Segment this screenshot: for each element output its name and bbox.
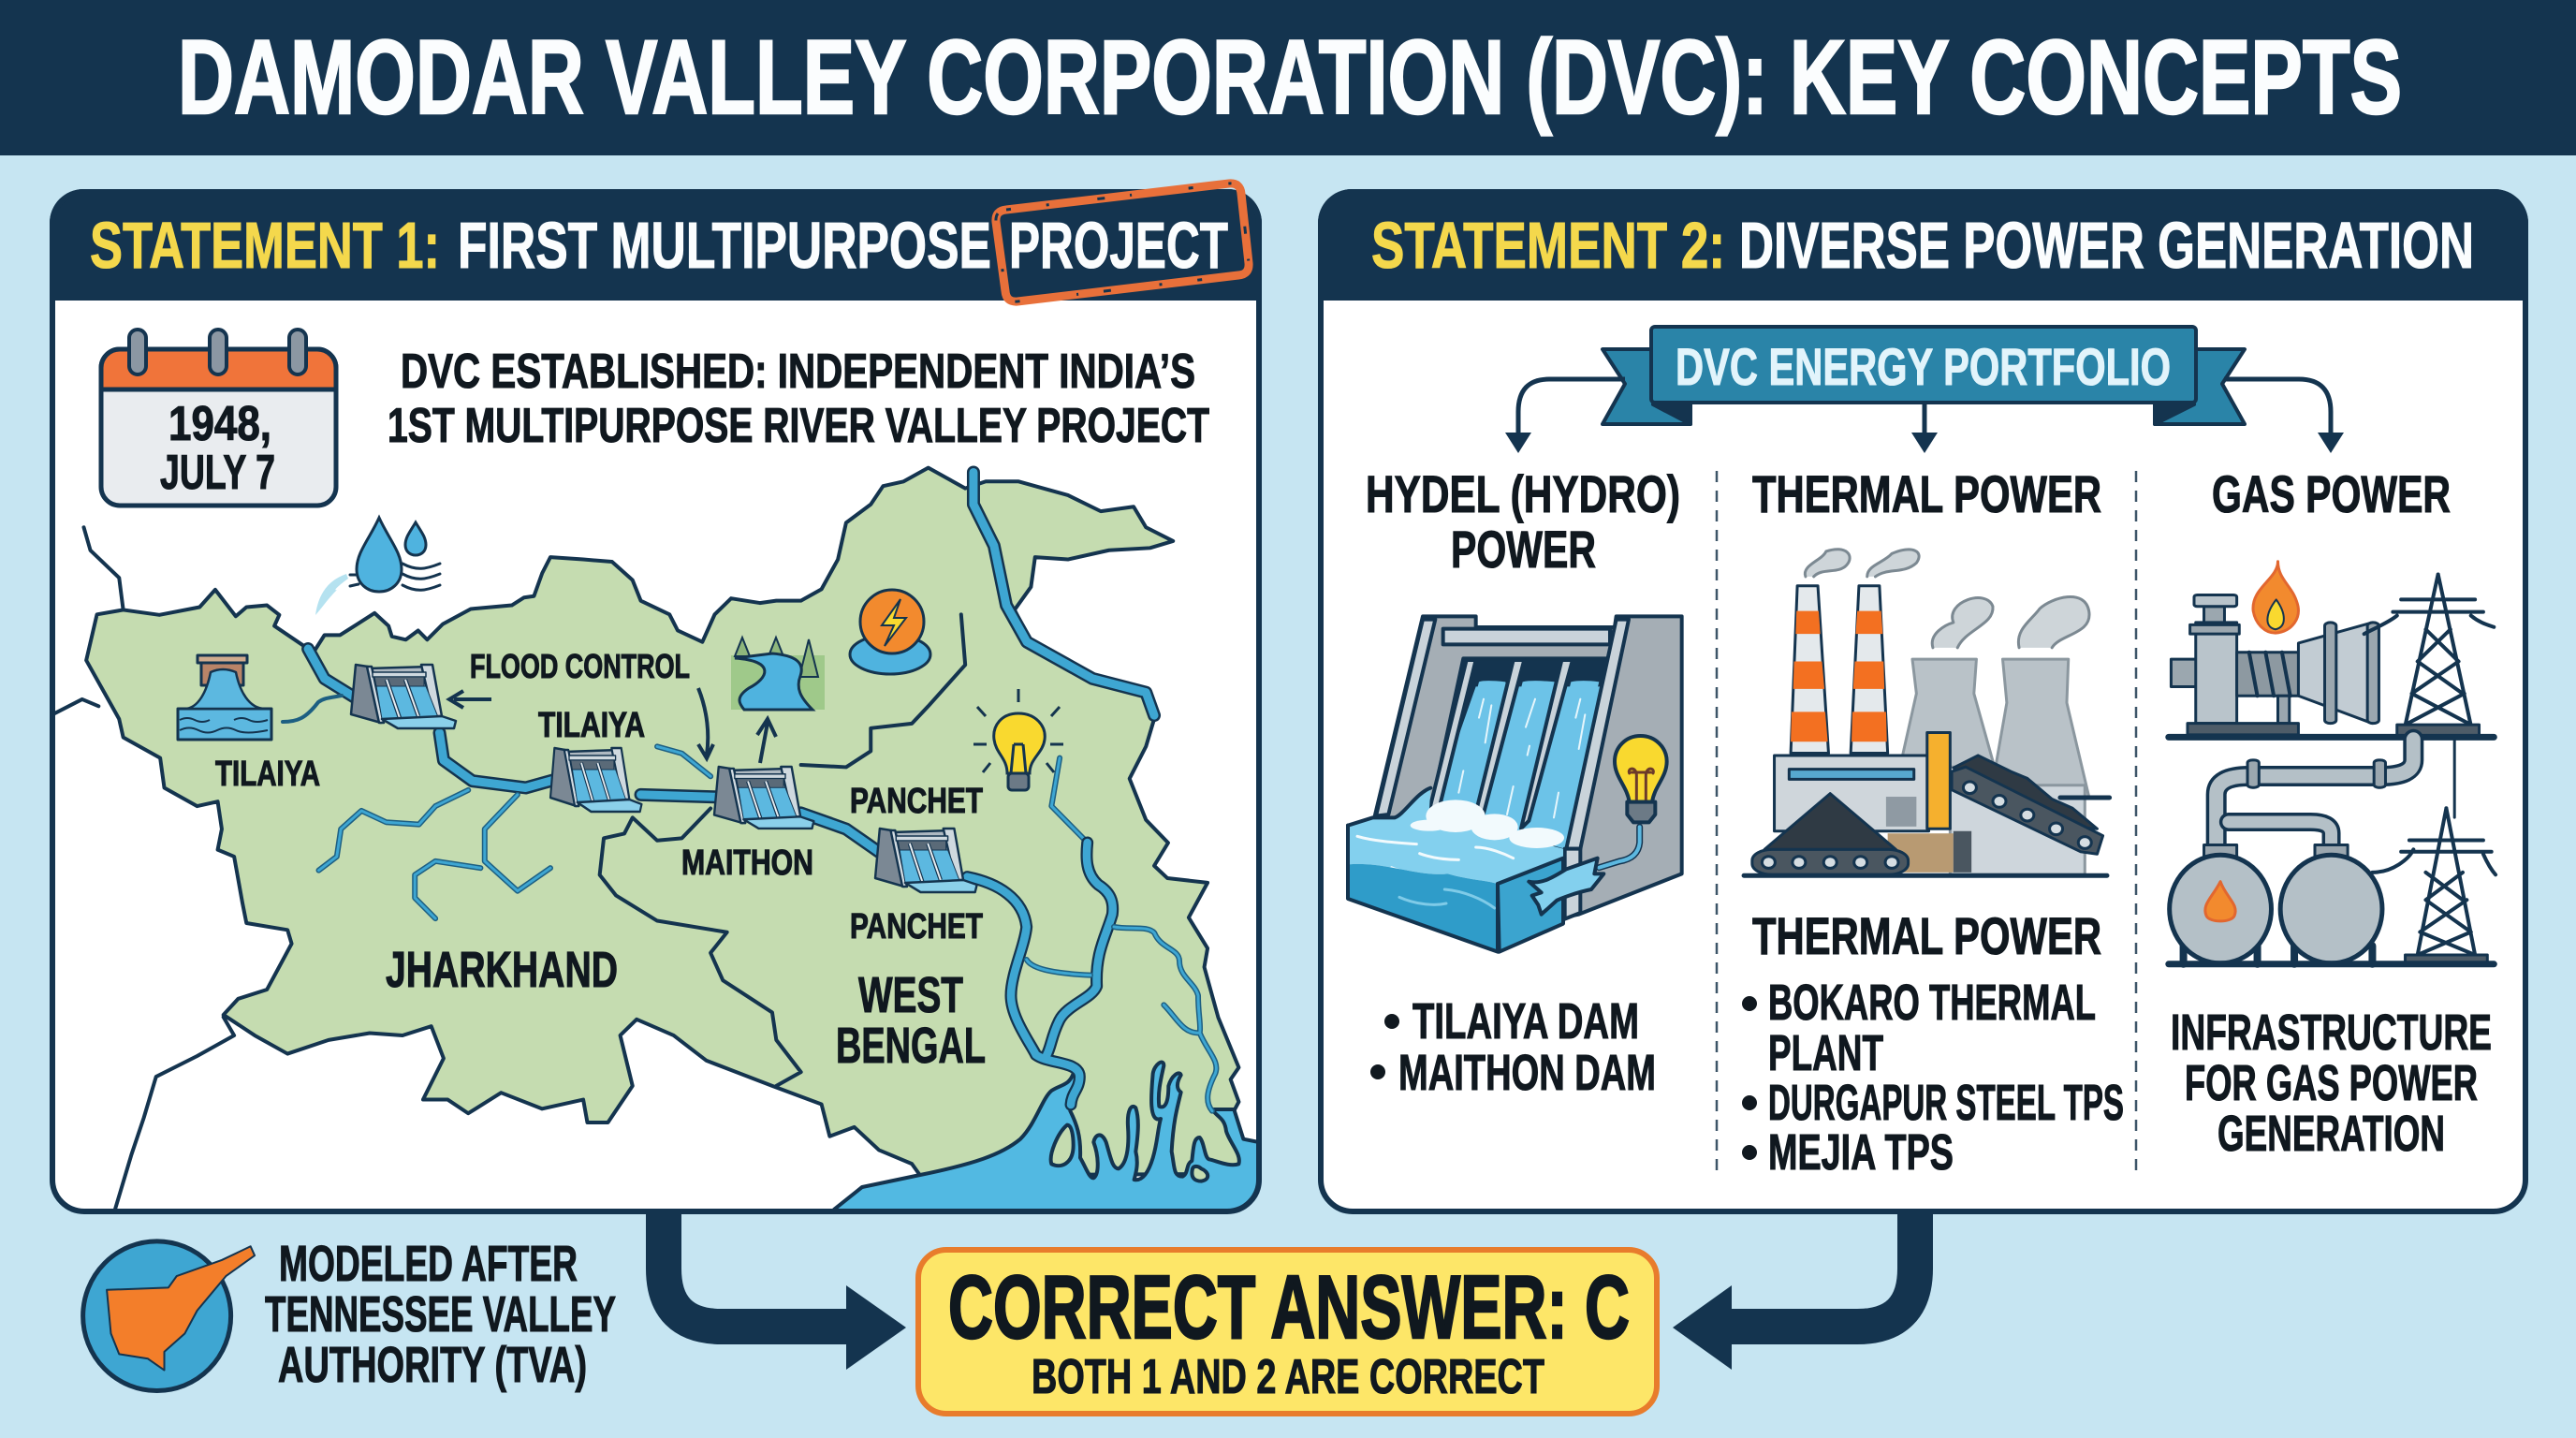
label: flood control: FLOOD CONTROL bbox=[470, 647, 690, 685]
calendar year: 1948, bbox=[168, 397, 271, 451]
bokaro line 1: BOKARO THERMAL bbox=[1768, 975, 2096, 1031]
TVA line 1: MODELED AFTER bbox=[279, 1236, 578, 1292]
heading: hydel line 2: POWER bbox=[1451, 520, 1596, 579]
dam 1 bbox=[351, 665, 456, 728]
label: maithon: MAITHON bbox=[681, 844, 813, 883]
bokaro line 2: PLANT bbox=[1768, 1025, 1883, 1081]
answer detail: BOTH 1 AND 2 ARE CORRECT bbox=[1032, 1350, 1544, 1404]
turbine bbox=[2171, 659, 2200, 686]
arrow: to thermal bbox=[1923, 404, 1926, 440]
column dividers bbox=[1717, 471, 2136, 1173]
calendar date: JULY 7 bbox=[160, 446, 275, 500]
gas description bbox=[2171, 1005, 2492, 1162]
answer box bbox=[918, 1250, 1657, 1414]
heading: gas power: GAS POWER bbox=[2212, 464, 2451, 523]
main rivers bbox=[308, 472, 1154, 852]
statement 2 label: STATEMENT 2: bbox=[1371, 209, 1725, 282]
tributaries bbox=[319, 746, 1088, 918]
gas line 3: GENERATION bbox=[2217, 1106, 2445, 1162]
small stream near dam 1 bbox=[283, 696, 342, 722]
TVA note bbox=[83, 1236, 616, 1393]
label: panchet upper: PANCHET bbox=[850, 782, 983, 821]
title banner bbox=[0, 0, 2576, 155]
arrowhead: hydel bbox=[1505, 433, 1531, 453]
delta islands bbox=[1051, 1125, 1208, 1181]
established line 2: 1ST MULTIPURPOSE RIVER VALLEY PROJECT bbox=[388, 399, 1209, 453]
arrow: flood control pointer bbox=[449, 691, 491, 708]
thermal heading 2: THERMAL POWER bbox=[1752, 906, 2101, 965]
flame bbox=[2253, 562, 2298, 633]
calendar icon bbox=[101, 330, 336, 506]
label: bengal: BENGAL bbox=[836, 1018, 986, 1074]
tanks bbox=[2184, 946, 2372, 964]
panel: statement 2 bbox=[1318, 189, 2528, 1211]
icon: electricity symbol bbox=[850, 590, 930, 674]
label: panchet lower: PANCHET bbox=[850, 907, 983, 946]
mejia: MEJIA TPS bbox=[1768, 1124, 1954, 1181]
arrow: statement 1 to answer bbox=[664, 1214, 906, 1370]
label: jharkhand: JHARKHAND bbox=[386, 942, 618, 998]
thermal plant list bbox=[1742, 975, 2124, 1181]
hydel dam list bbox=[1370, 993, 1656, 1101]
icon: TVA region map bbox=[83, 1241, 255, 1391]
TVA line 3: AUTHORITY (TVA) bbox=[278, 1337, 587, 1393]
smoke bbox=[1805, 550, 2089, 648]
panel 1 border bbox=[52, 192, 1259, 1211]
panel 2 header bbox=[1318, 189, 2528, 301]
arrow: to hydel bbox=[1518, 379, 1625, 440]
delta and sea bbox=[834, 843, 1264, 1217]
pipes bbox=[2217, 740, 2413, 849]
established line 1: DVC ESTABLISHED: INDEPENDENT INDIA’S bbox=[401, 345, 1195, 399]
illustration: thermal plant bbox=[1744, 550, 2110, 875]
thin branches bbox=[1027, 927, 1216, 1111]
arrow: to gas bbox=[2224, 379, 2331, 440]
map of the Damodar valley bbox=[51, 468, 1264, 1217]
dam 3 bbox=[714, 767, 813, 829]
highlighted word project: PROJECT bbox=[1009, 209, 1228, 282]
banner text: DVC ENERGY PORTFOLIO bbox=[1676, 337, 2171, 396]
icon: waterfall bbox=[178, 655, 271, 740]
arrow: statement 2 to answer bbox=[1673, 1214, 1915, 1370]
tower 1 bbox=[2364, 574, 2494, 726]
arrow: up to forest bbox=[757, 719, 776, 763]
heading: thermal power: THERMAL POWER bbox=[1752, 464, 2101, 523]
durgapur: DURGAPUR STEEL TPS bbox=[1768, 1075, 2124, 1131]
maithon dam: MAITHON DAM bbox=[1398, 1045, 1656, 1101]
statement 1 label: STATEMENT 1: bbox=[90, 209, 440, 282]
icon: water drop bbox=[315, 518, 440, 615]
lower rivers bbox=[967, 843, 1113, 1105]
heading: hydel line 1: HYDEL (HYDRO) bbox=[1366, 464, 1680, 523]
portfolio banner bbox=[1603, 327, 2245, 424]
statement 1 heading: FIRST MULTIPURPOSE bbox=[458, 209, 991, 282]
tower 2 bbox=[2372, 808, 2496, 955]
outside borders bbox=[51, 527, 234, 1210]
illustration: gas power infrastructure bbox=[2169, 562, 2496, 964]
icon: light bulb bbox=[973, 689, 1063, 790]
illustration: hydro dam bbox=[1348, 616, 1682, 952]
panel: statement 1 bbox=[50, 183, 1264, 1217]
arrow: down to maithon bbox=[698, 688, 713, 758]
label: tilaiya: TILAIYA bbox=[215, 755, 320, 794]
arrowhead: gas bbox=[2318, 433, 2344, 453]
icon: forest river bbox=[731, 638, 825, 710]
correct answer: CORRECT ANSWER: C bbox=[948, 1257, 1630, 1357]
dam 2 bbox=[550, 748, 641, 812]
land bbox=[86, 468, 1257, 1175]
panel 1 header bbox=[50, 189, 1262, 301]
arrowhead: thermal bbox=[1911, 433, 1938, 453]
label: tilaiya dam: TILAIYA bbox=[538, 706, 645, 745]
state boundary bbox=[600, 614, 965, 1086]
label: west: WEST bbox=[858, 967, 963, 1023]
tilaiya dam: TILAIYA DAM bbox=[1412, 993, 1639, 1049]
sea bbox=[834, 1063, 1264, 1217]
stamp outline around project bbox=[996, 183, 1249, 301]
TVA line 2: TENNESSEE VALLEY bbox=[265, 1286, 616, 1343]
dam 4 bbox=[875, 829, 977, 892]
